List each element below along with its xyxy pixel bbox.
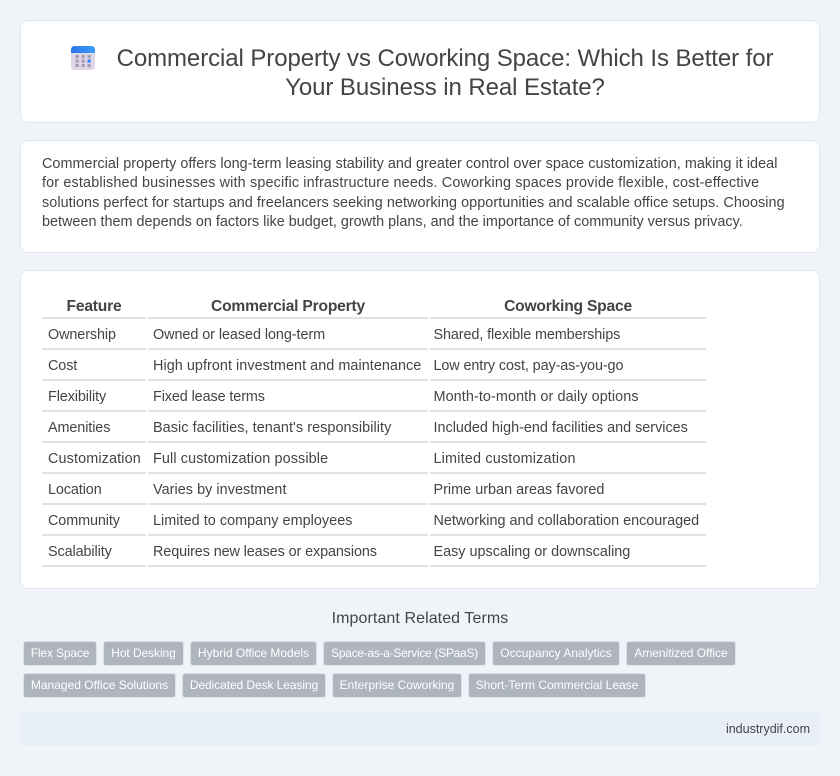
intro text: solutions perfect for startups and freelancers seeking networking opportunities and scalable office setups. Choosing [42, 194, 785, 210]
row: flexibility: Month-to-month or daily options [434, 389, 639, 405]
row: amenities: Basic facilities, tenant's responsibility [153, 420, 391, 436]
row: customization: Full customization possible [153, 451, 328, 467]
row: scalability: Scalability [48, 544, 112, 560]
footer source text: industrydif.com [726, 722, 810, 736]
table header row: Commercial Property [211, 298, 365, 315]
comparison table [42, 298, 706, 567]
related term tags: Amenitized Office [634, 646, 728, 660]
row: ownership: Ownership [48, 327, 116, 343]
row: community [48, 513, 699, 529]
row: flexibility: Fixed lease terms [153, 389, 265, 405]
related term tags: Space-as-a-Service (SPaaS) [331, 646, 478, 660]
related term tags: Dedicated Desk Leasing [190, 678, 318, 692]
related term tags: Short-Term Commercial Lease [476, 678, 638, 692]
related term tags: Enterprise Coworking [340, 678, 454, 692]
row: customization [48, 451, 576, 467]
row: amenities: Amenities [48, 420, 110, 436]
row: location: Varies by investment [153, 482, 287, 498]
row: community: Limited to company employees [153, 513, 352, 529]
table header row: Coworking Space [504, 298, 632, 315]
row: ownership: Shared, flexible memberships [434, 327, 620, 343]
row: cost [48, 358, 623, 374]
header panel [20, 20, 820, 123]
title [117, 45, 774, 101]
intro text: Commercial property offers long-term leasing stability and greater control over space customization, making it ideal [42, 156, 777, 172]
related terms heading: Important Related Terms [332, 610, 508, 627]
title: Your Business in Real Estate? [285, 74, 605, 101]
related term tags: Hybrid Office Models [198, 646, 309, 660]
table header row: Feature [67, 298, 121, 315]
intro panel [20, 140, 820, 253]
intro text [42, 156, 785, 230]
row: community: Community [48, 513, 120, 529]
row: ownership: Owned or leased long-term [153, 327, 325, 343]
related term tags: Flex Space [31, 646, 89, 660]
row: amenities: Included high-end facilities and services [434, 420, 688, 436]
row: scalability [48, 544, 630, 560]
related term tags [23, 641, 736, 698]
table header row [67, 298, 632, 315]
row: location [48, 482, 604, 498]
row: customization: Limited customization [434, 451, 576, 467]
footer bar [20, 712, 820, 746]
icon: calendar [71, 46, 95, 70]
row: cost: Low entry cost, pay-as-you-go [434, 358, 623, 374]
related term tags: Occupancy Analytics [500, 646, 612, 660]
row: scalability: Easy upscaling or downscaling [434, 544, 630, 560]
table panel [20, 270, 820, 589]
related term tags: Hot Desking [111, 646, 176, 660]
row: community: Networking and collaboration encouraged [434, 513, 699, 529]
related term tags: Managed Office Solutions [31, 678, 168, 692]
row: cost: High upfront investment and maintenance [153, 358, 421, 374]
row: scalability: Requires new leases or expansions [153, 544, 377, 560]
row: location: Prime urban areas favored [434, 482, 604, 498]
row: location: Location [48, 482, 102, 498]
row: cost: Cost [48, 358, 77, 374]
row: flexibility: Flexibility [48, 389, 106, 405]
title: Commercial Property vs Coworking Space: Which Is Better for [117, 45, 773, 72]
row: amenities [48, 420, 688, 436]
row: customization: Customization [48, 451, 141, 467]
row: flexibility [48, 389, 639, 405]
intro text: between them depends on factors like budget, growth plans, and the importance of community versus privacy. [42, 214, 743, 230]
intro text: for established businesses with specific infrastructure needs. Coworking spaces provide flexible, cost-effective [42, 175, 759, 191]
row: ownership [48, 327, 620, 343]
